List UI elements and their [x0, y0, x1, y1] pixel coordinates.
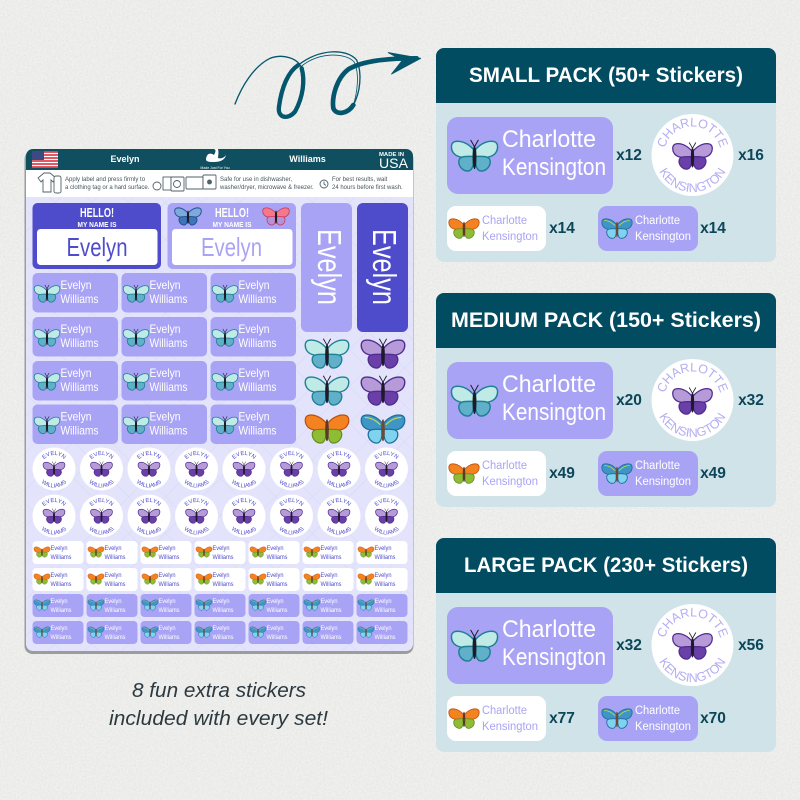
round label: CHARLOTTE	[658, 118, 728, 148]
white sticker	[194, 541, 246, 564]
white sticker	[140, 541, 192, 564]
purple sticker: Williams	[374, 607, 396, 614]
white label: Charlotte	[482, 460, 527, 472]
purple sticker: Williams	[212, 607, 234, 614]
sticker: Evelyn	[150, 366, 180, 380]
purple sticker: Williams	[50, 607, 72, 614]
quantity: x32	[616, 637, 642, 654]
white label	[447, 206, 546, 251]
white sticker: Williams	[320, 581, 342, 588]
purple label	[598, 696, 698, 741]
icon: dinosaur logo	[200, 149, 230, 170]
large label	[447, 607, 613, 684]
round sticker	[175, 448, 218, 490]
purple sticker: Evelyn	[212, 625, 230, 632]
purple sticker	[140, 621, 192, 644]
white sticker	[248, 568, 300, 591]
panel: large pack	[436, 538, 776, 752]
icon: shirt and bottle	[38, 173, 61, 193]
sticker: Williams	[60, 424, 98, 438]
round label: KENSINGTON	[660, 412, 726, 438]
round sticker	[80, 494, 123, 538]
purple sticker: Evelyn	[266, 625, 284, 632]
round sticker	[222, 494, 266, 538]
white sticker: Evelyn	[158, 545, 176, 552]
white sticker: Evelyn	[374, 572, 392, 579]
vertical label: dark: Evelyn	[366, 229, 403, 305]
quantity: x77	[549, 710, 575, 727]
instruction: wait: 24 hours before first wash.	[332, 185, 403, 191]
vertical label: light: Evelyn	[311, 229, 348, 305]
purple sticker	[86, 621, 138, 644]
white sticker: Williams	[320, 554, 342, 561]
white sticker	[194, 568, 246, 591]
sticker: Williams	[60, 292, 98, 306]
round sticker: WILLIAMS	[374, 526, 398, 534]
quantity: x14	[549, 220, 575, 237]
white sticker: Evelyn	[50, 545, 68, 552]
large label: Charlotte	[502, 371, 596, 398]
large label: Charlotte	[502, 126, 596, 153]
round sticker: EVELYN	[184, 450, 209, 459]
white sticker: Evelyn	[104, 545, 122, 552]
white sticker: Evelyn	[104, 572, 122, 579]
quantity: x32	[738, 392, 764, 409]
white sticker: Williams	[212, 581, 234, 588]
vertical label: light	[301, 203, 352, 332]
purple label: Charlotte	[635, 705, 680, 717]
name tag: dark: Evelyn	[66, 232, 128, 262]
round sticker: EVELYN	[326, 450, 352, 459]
white sticker: Evelyn	[320, 545, 338, 552]
white sticker: Williams	[266, 581, 288, 588]
sticker: Evelyn	[150, 278, 180, 292]
white sticker: Williams	[374, 554, 396, 561]
large label: Kensington	[502, 154, 606, 181]
name tag: dark: HELLO!	[80, 205, 114, 220]
purple sticker	[194, 621, 246, 644]
purple sticker: Williams	[104, 634, 126, 641]
name tag: dark: MY NAME IS	[78, 220, 116, 229]
sticker: Evelyn	[238, 410, 270, 424]
white sticker: Williams	[50, 581, 72, 588]
round label: KENSINGTON	[660, 658, 726, 682]
purple sticker	[302, 621, 354, 644]
large label	[447, 362, 613, 439]
name tag: light with butterflies: Evelyn	[201, 232, 262, 262]
large label: Kensington	[502, 644, 606, 671]
white sticker	[86, 568, 138, 591]
sticker	[122, 273, 207, 312]
round sticker	[80, 448, 123, 490]
white label: Charlotte	[482, 705, 527, 717]
quantity: x16	[738, 147, 764, 164]
curly arrow	[235, 52, 421, 117]
made in USA mark: MADE IN	[379, 152, 404, 158]
round sticker	[128, 494, 170, 538]
sticker: Evelyn	[60, 366, 92, 380]
sticker	[210, 361, 296, 400]
round sticker: EVELYN	[374, 498, 399, 506]
round sticker: WILLIAMS	[42, 479, 66, 488]
purple sticker	[194, 594, 246, 617]
round sticker: WILLIAMS	[90, 526, 114, 534]
white sticker	[32, 541, 84, 564]
white sticker: Evelyn	[50, 572, 68, 579]
round sticker: EVELYN	[136, 498, 162, 506]
quantity: x49	[700, 465, 726, 482]
round sticker: WILLIAMS	[280, 526, 304, 534]
purple sticker: Williams	[158, 634, 180, 641]
round sticker	[365, 494, 408, 538]
sticker sheet	[24, 149, 414, 654]
icon: dinosaur logo: Made Just For You	[200, 166, 230, 170]
sticker: Williams	[60, 380, 98, 394]
white label	[447, 696, 546, 741]
round sticker: EVELYN	[42, 498, 66, 506]
white sticker: Williams	[50, 554, 72, 561]
sticker: Evelyn	[150, 410, 180, 424]
purple sticker: Evelyn	[320, 625, 338, 632]
large label: Kensington	[502, 399, 606, 426]
heading: MEDIUM PACK (150+ Stickers)	[451, 309, 761, 332]
white sticker: Williams	[104, 554, 126, 561]
purple label	[598, 451, 698, 496]
sheet header first name: Evelyn	[110, 154, 140, 164]
round sticker: EVELYN	[232, 498, 256, 506]
purple sticker	[248, 594, 300, 617]
round sticker	[175, 494, 218, 538]
white sticker	[356, 568, 408, 591]
purple sticker	[356, 594, 408, 617]
purple sticker: Evelyn	[212, 598, 230, 605]
round sticker: EVELYN	[279, 450, 304, 459]
white label: Kensington	[482, 231, 538, 243]
quantity: x70	[700, 710, 726, 727]
white sticker	[32, 568, 84, 591]
sticker: Williams	[238, 336, 276, 350]
white sticker: Williams	[104, 581, 126, 588]
round label: KENSINGTON	[660, 168, 726, 192]
purple label: Kensington	[635, 476, 691, 488]
round sticker: EVELYN	[42, 450, 66, 459]
white sticker: Evelyn	[212, 545, 230, 552]
sticker	[32, 273, 118, 312]
purple label: Charlotte	[635, 215, 680, 227]
purple label: Kensington	[635, 721, 691, 733]
name tag: light with butterflies: MY NAME IS	[212, 220, 252, 229]
white sticker: Evelyn	[158, 572, 176, 579]
sticker	[122, 361, 207, 400]
round label	[652, 114, 734, 196]
sticker	[210, 317, 296, 356]
purple label: Kensington	[635, 231, 691, 243]
purple sticker: Williams	[158, 607, 180, 614]
round sticker	[32, 494, 76, 538]
white sticker: Williams	[266, 554, 288, 561]
white label: Kensington	[482, 476, 538, 488]
instruction: apply	[65, 177, 150, 191]
white label: Charlotte	[482, 215, 527, 227]
round sticker: EVELYN	[374, 450, 399, 459]
name tag: light with butterflies: HELLO!	[215, 205, 249, 220]
large label	[447, 117, 613, 194]
white sticker: Evelyn	[266, 572, 284, 579]
purple sticker: Williams	[320, 607, 342, 614]
round sticker: EVELYN	[89, 498, 114, 506]
purple sticker: Evelyn	[158, 598, 176, 605]
white sticker: Williams	[374, 581, 396, 588]
purple sticker: Williams	[212, 634, 234, 641]
round sticker: WILLIAMS	[327, 526, 351, 534]
round sticker: WILLIAMS	[374, 479, 398, 488]
round sticker	[318, 448, 360, 490]
white sticker: Evelyn	[374, 545, 392, 552]
purple sticker: Evelyn	[104, 598, 122, 605]
white sticker: Evelyn	[320, 572, 338, 579]
purple sticker	[248, 621, 300, 644]
made in USA mark: USA	[379, 155, 409, 171]
round sticker	[270, 494, 313, 538]
purple sticker: Evelyn	[374, 598, 392, 605]
icons: appliances	[153, 175, 216, 191]
purple label	[598, 206, 698, 251]
round sticker: EVELYN	[232, 450, 256, 459]
quantity: x49	[549, 465, 575, 482]
purple sticker	[140, 594, 192, 617]
caption	[109, 680, 328, 730]
grid of name stickers	[32, 273, 296, 444]
sticker: Williams	[150, 380, 188, 394]
white label: Kensington	[482, 721, 538, 733]
purple sticker: Williams	[374, 634, 396, 641]
instruction: wait	[332, 177, 403, 191]
sticker: Evelyn	[60, 278, 92, 292]
round sticker	[270, 448, 313, 490]
instruction: wait: For best results, wait	[332, 177, 388, 183]
small purple stickers	[32, 594, 408, 644]
purple sticker: Evelyn	[158, 625, 176, 632]
sticker: Evelyn	[60, 322, 92, 336]
white label	[447, 451, 546, 496]
round sticker: WILLIAMS	[42, 526, 66, 534]
quantity: x20	[616, 392, 642, 409]
round sticker: WILLIAMS	[232, 526, 256, 534]
extra butterfly stickers	[305, 339, 405, 443]
round sticker: WILLIAMS	[184, 479, 208, 488]
round sticker: EVELYN	[279, 498, 304, 506]
caption: 8 fun extra stickers	[132, 680, 306, 702]
white sticker	[140, 568, 192, 591]
sticker: Evelyn	[238, 366, 270, 380]
white sticker	[302, 541, 354, 564]
sticker: Evelyn	[238, 278, 270, 292]
round sticker: WILLIAMS	[327, 479, 351, 488]
purple sticker	[86, 594, 138, 617]
quantity: x14	[700, 220, 726, 237]
instruction: apply: a clothing tag or a hard surface.	[65, 185, 150, 191]
vertical label: dark	[357, 203, 408, 332]
round stickers	[32, 448, 408, 538]
small white stickers	[32, 541, 408, 591]
panel: small pack	[436, 48, 776, 262]
round sticker: EVELYN	[184, 498, 209, 506]
sticker	[122, 404, 207, 444]
sticker: Williams	[150, 336, 188, 350]
purple sticker: Williams	[104, 607, 126, 614]
sticker: Williams	[150, 424, 188, 438]
round sticker: WILLIAMS	[280, 479, 304, 488]
sticker	[210, 404, 296, 444]
heading: SMALL PACK (50+ Stickers)	[469, 64, 743, 87]
purple sticker: Williams	[50, 634, 72, 641]
round label: CHARLOTTE	[658, 608, 728, 638]
purple sticker: Evelyn	[374, 625, 392, 632]
round sticker: EVELYN	[89, 450, 114, 459]
name tag: dark	[32, 203, 161, 269]
round sticker: WILLIAMS	[90, 479, 114, 488]
white sticker	[356, 541, 408, 564]
purple sticker	[32, 594, 84, 617]
sticker: Williams	[150, 292, 188, 306]
sticker	[210, 273, 296, 312]
icon: US flag	[32, 151, 58, 168]
round sticker	[318, 494, 360, 538]
round sticker: WILLIAMS	[232, 479, 256, 488]
purple sticker: Evelyn	[50, 625, 68, 632]
white sticker: Evelyn	[266, 545, 284, 552]
round label: CHARLOTTE	[658, 362, 728, 392]
sticker: Williams	[238, 424, 276, 438]
round sticker: EVELYN	[136, 450, 162, 459]
sticker: Williams	[238, 292, 276, 306]
sticker	[32, 361, 118, 400]
round sticker	[365, 448, 408, 490]
sticker: Evelyn	[238, 322, 270, 336]
sticker: Williams	[238, 380, 276, 394]
instruction: safe use: Safe for use in dishwasher,	[220, 177, 292, 183]
heading: LARGE PACK (230+ Stickers)	[464, 554, 748, 577]
round sticker: WILLIAMS	[184, 526, 208, 534]
round sticker: WILLIAMS	[137, 479, 161, 488]
purple sticker: Williams	[266, 634, 288, 641]
round sticker	[222, 448, 266, 490]
white sticker	[302, 568, 354, 591]
purple sticker	[356, 621, 408, 644]
purple sticker	[32, 621, 84, 644]
round label	[652, 604, 734, 686]
white sticker	[86, 541, 138, 564]
caption: included with every set!	[109, 708, 328, 730]
sticker: Evelyn	[150, 322, 180, 336]
large label: Charlotte	[502, 616, 596, 643]
round sticker	[32, 448, 76, 490]
white sticker: Williams	[158, 554, 180, 561]
round sticker	[128, 448, 170, 490]
white sticker: Evelyn	[212, 572, 230, 579]
round sticker: EVELYN	[326, 498, 352, 506]
white sticker: Williams	[212, 554, 234, 561]
instruction: apply: Apply label and press firmly to	[65, 177, 146, 183]
round sticker: WILLIAMS	[137, 526, 161, 534]
purple sticker: Williams	[266, 607, 288, 614]
sticker: Williams	[60, 336, 98, 350]
white sticker: Williams	[158, 581, 180, 588]
purple label: Charlotte	[635, 460, 680, 472]
quantity: x12	[616, 147, 642, 164]
sticker	[32, 317, 118, 356]
quantity: x56	[738, 637, 764, 654]
instruction: safe use	[219, 177, 314, 191]
sticker	[32, 404, 118, 444]
icon: clock	[320, 180, 328, 188]
purple sticker: Evelyn	[50, 598, 68, 605]
purple sticker	[302, 594, 354, 617]
purple sticker: Williams	[320, 634, 342, 641]
sheet header last name: Williams	[289, 154, 326, 164]
purple sticker: Evelyn	[266, 598, 284, 605]
sticker: Evelyn	[60, 410, 92, 424]
round label	[652, 359, 734, 441]
purple sticker: Evelyn	[104, 625, 122, 632]
purple sticker: Evelyn	[320, 598, 338, 605]
white sticker	[248, 541, 300, 564]
instruction: safe use: washer/dryer, microwave & freezer.	[219, 185, 314, 191]
panel: medium pack	[436, 293, 776, 507]
name tag: light with butterflies	[168, 203, 296, 269]
sticker	[122, 317, 207, 356]
